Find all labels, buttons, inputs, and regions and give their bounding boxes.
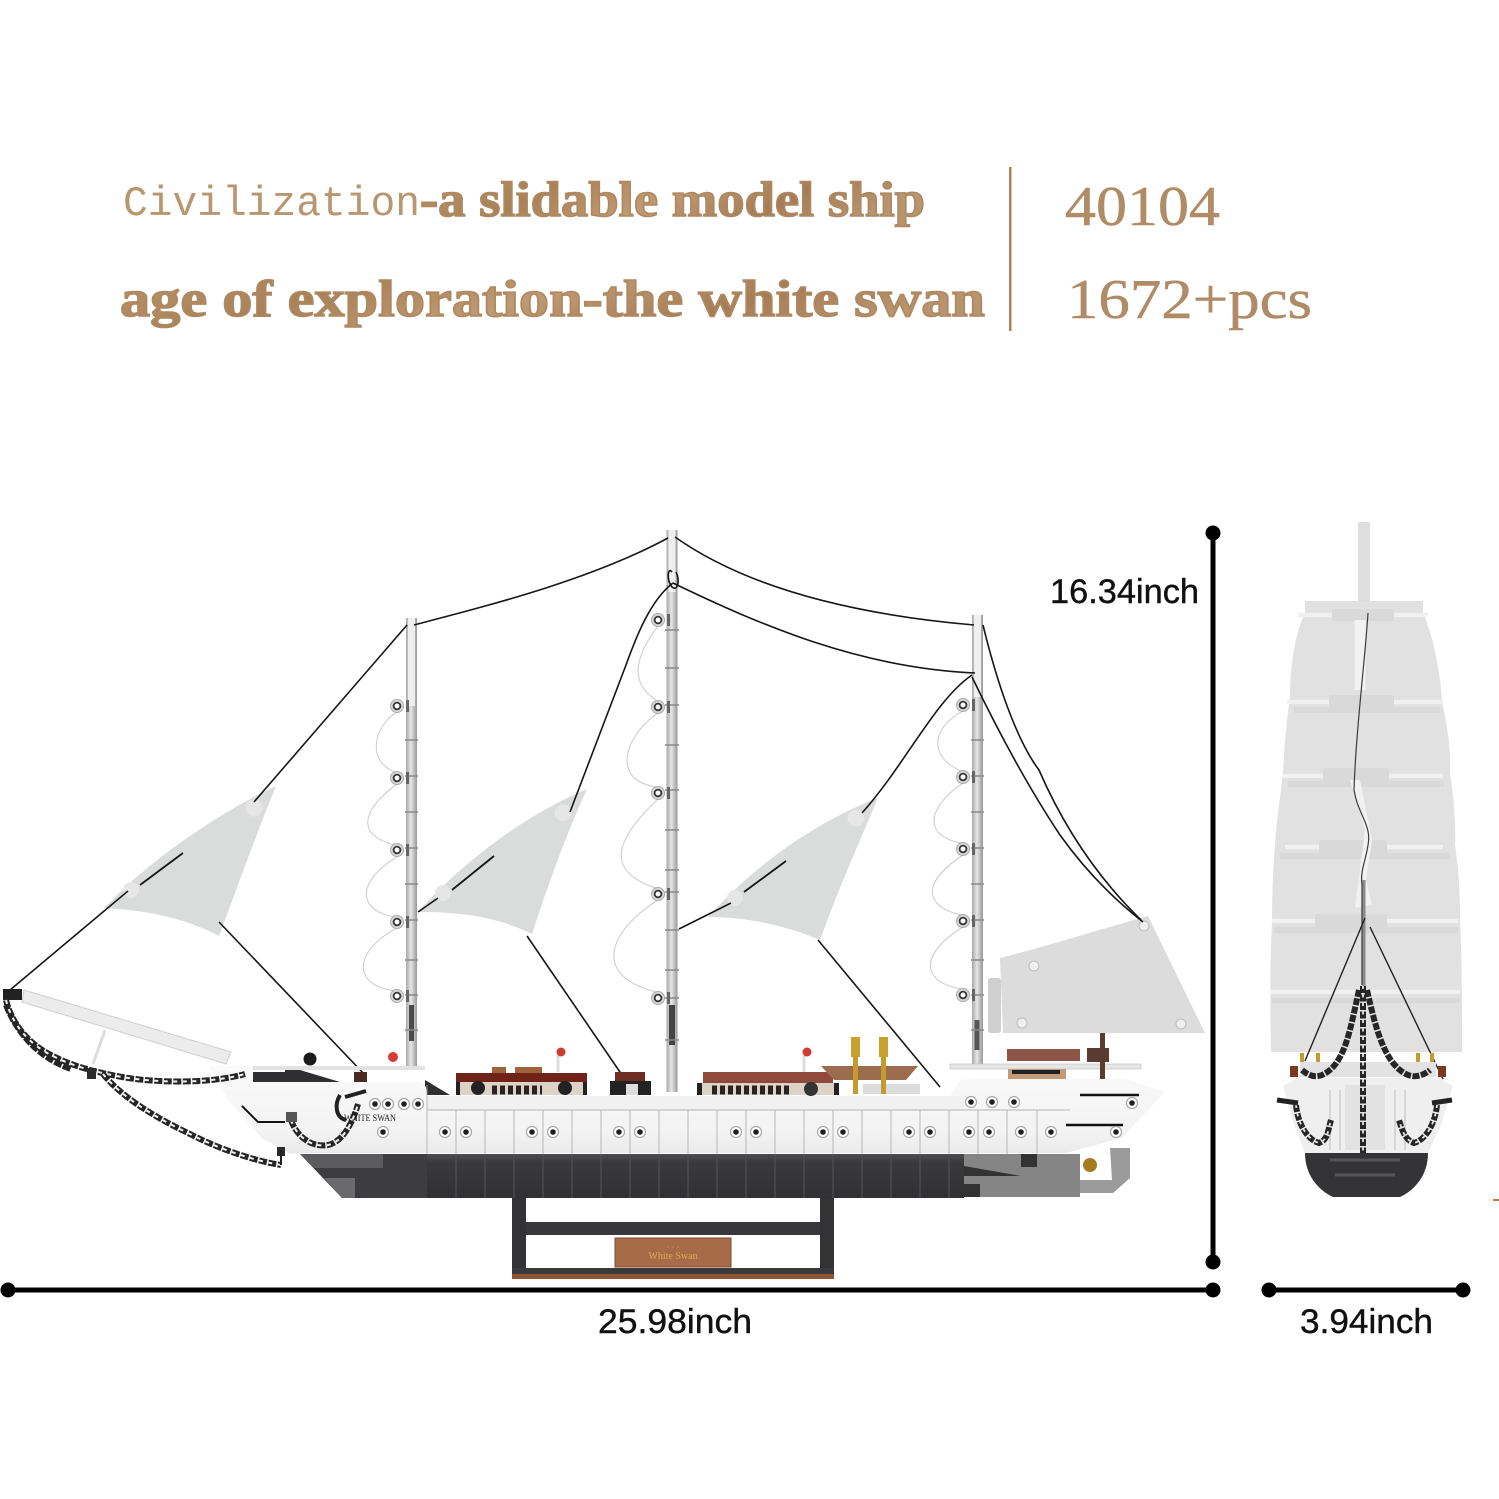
side ship: stern sail (988, 916, 1205, 1033)
side ship: thin rigging spirals (363, 626, 963, 992)
title: first line (123, 171, 925, 228)
side ship: bowsprit (3, 989, 231, 1064)
front ship: hull (1283, 1053, 1453, 1197)
front ship: yards (1270, 609, 1460, 992)
front ship: mast top (1358, 522, 1370, 606)
side ship: white upper hull (209, 1066, 1165, 1154)
side ship: mast rings (390, 614, 975, 1004)
length label: 25.98inch (598, 1303, 752, 1341)
divider (1009, 167, 1012, 331)
side ship: rigging ropes (10, 537, 1143, 1087)
side ship: name plaque: · · · (666, 1242, 680, 1252)
side ship: deck items (245, 1033, 1141, 1096)
side ship: hull portholes (370, 1096, 1138, 1138)
title: first line: -a slidable model ship (420, 171, 925, 227)
side ship: dark lower hull (300, 1148, 1130, 1198)
side view ship (3, 530, 1205, 1279)
title: second line: age of exploration-the white swan (120, 271, 985, 328)
side ship: masts (405, 530, 984, 1092)
side ship: display stand (512, 1198, 834, 1279)
title: first line: Civilization (123, 180, 420, 228)
side ship: name on hull: WHITE SWAN (344, 1113, 396, 1123)
side ship: name plaque (615, 1238, 731, 1267)
dimension: height bar (1206, 526, 1220, 1270)
height label: 16.34inch (1050, 573, 1199, 611)
side ship: name plaque: White Swan (648, 1251, 698, 1262)
front ship: center mast and lines (1305, 613, 1443, 1079)
side ship: anchor chains (6, 1000, 366, 1165)
dimension: length bar (0, 1282, 1220, 1298)
width label: 3.94inch (1300, 1303, 1433, 1341)
side ship: triangular sails (104, 786, 878, 940)
front ship: sails (1270, 601, 1462, 1052)
piece count: 1672+pcs (1067, 269, 1312, 331)
dimension: width bar (1262, 1282, 1470, 1298)
front view ship (1270, 522, 1462, 1197)
edge mark (1493, 1199, 1499, 1201)
side ship: sail clips (123, 800, 864, 906)
front ship: chains (1277, 986, 1452, 1153)
model number: 40104 (1065, 176, 1220, 238)
